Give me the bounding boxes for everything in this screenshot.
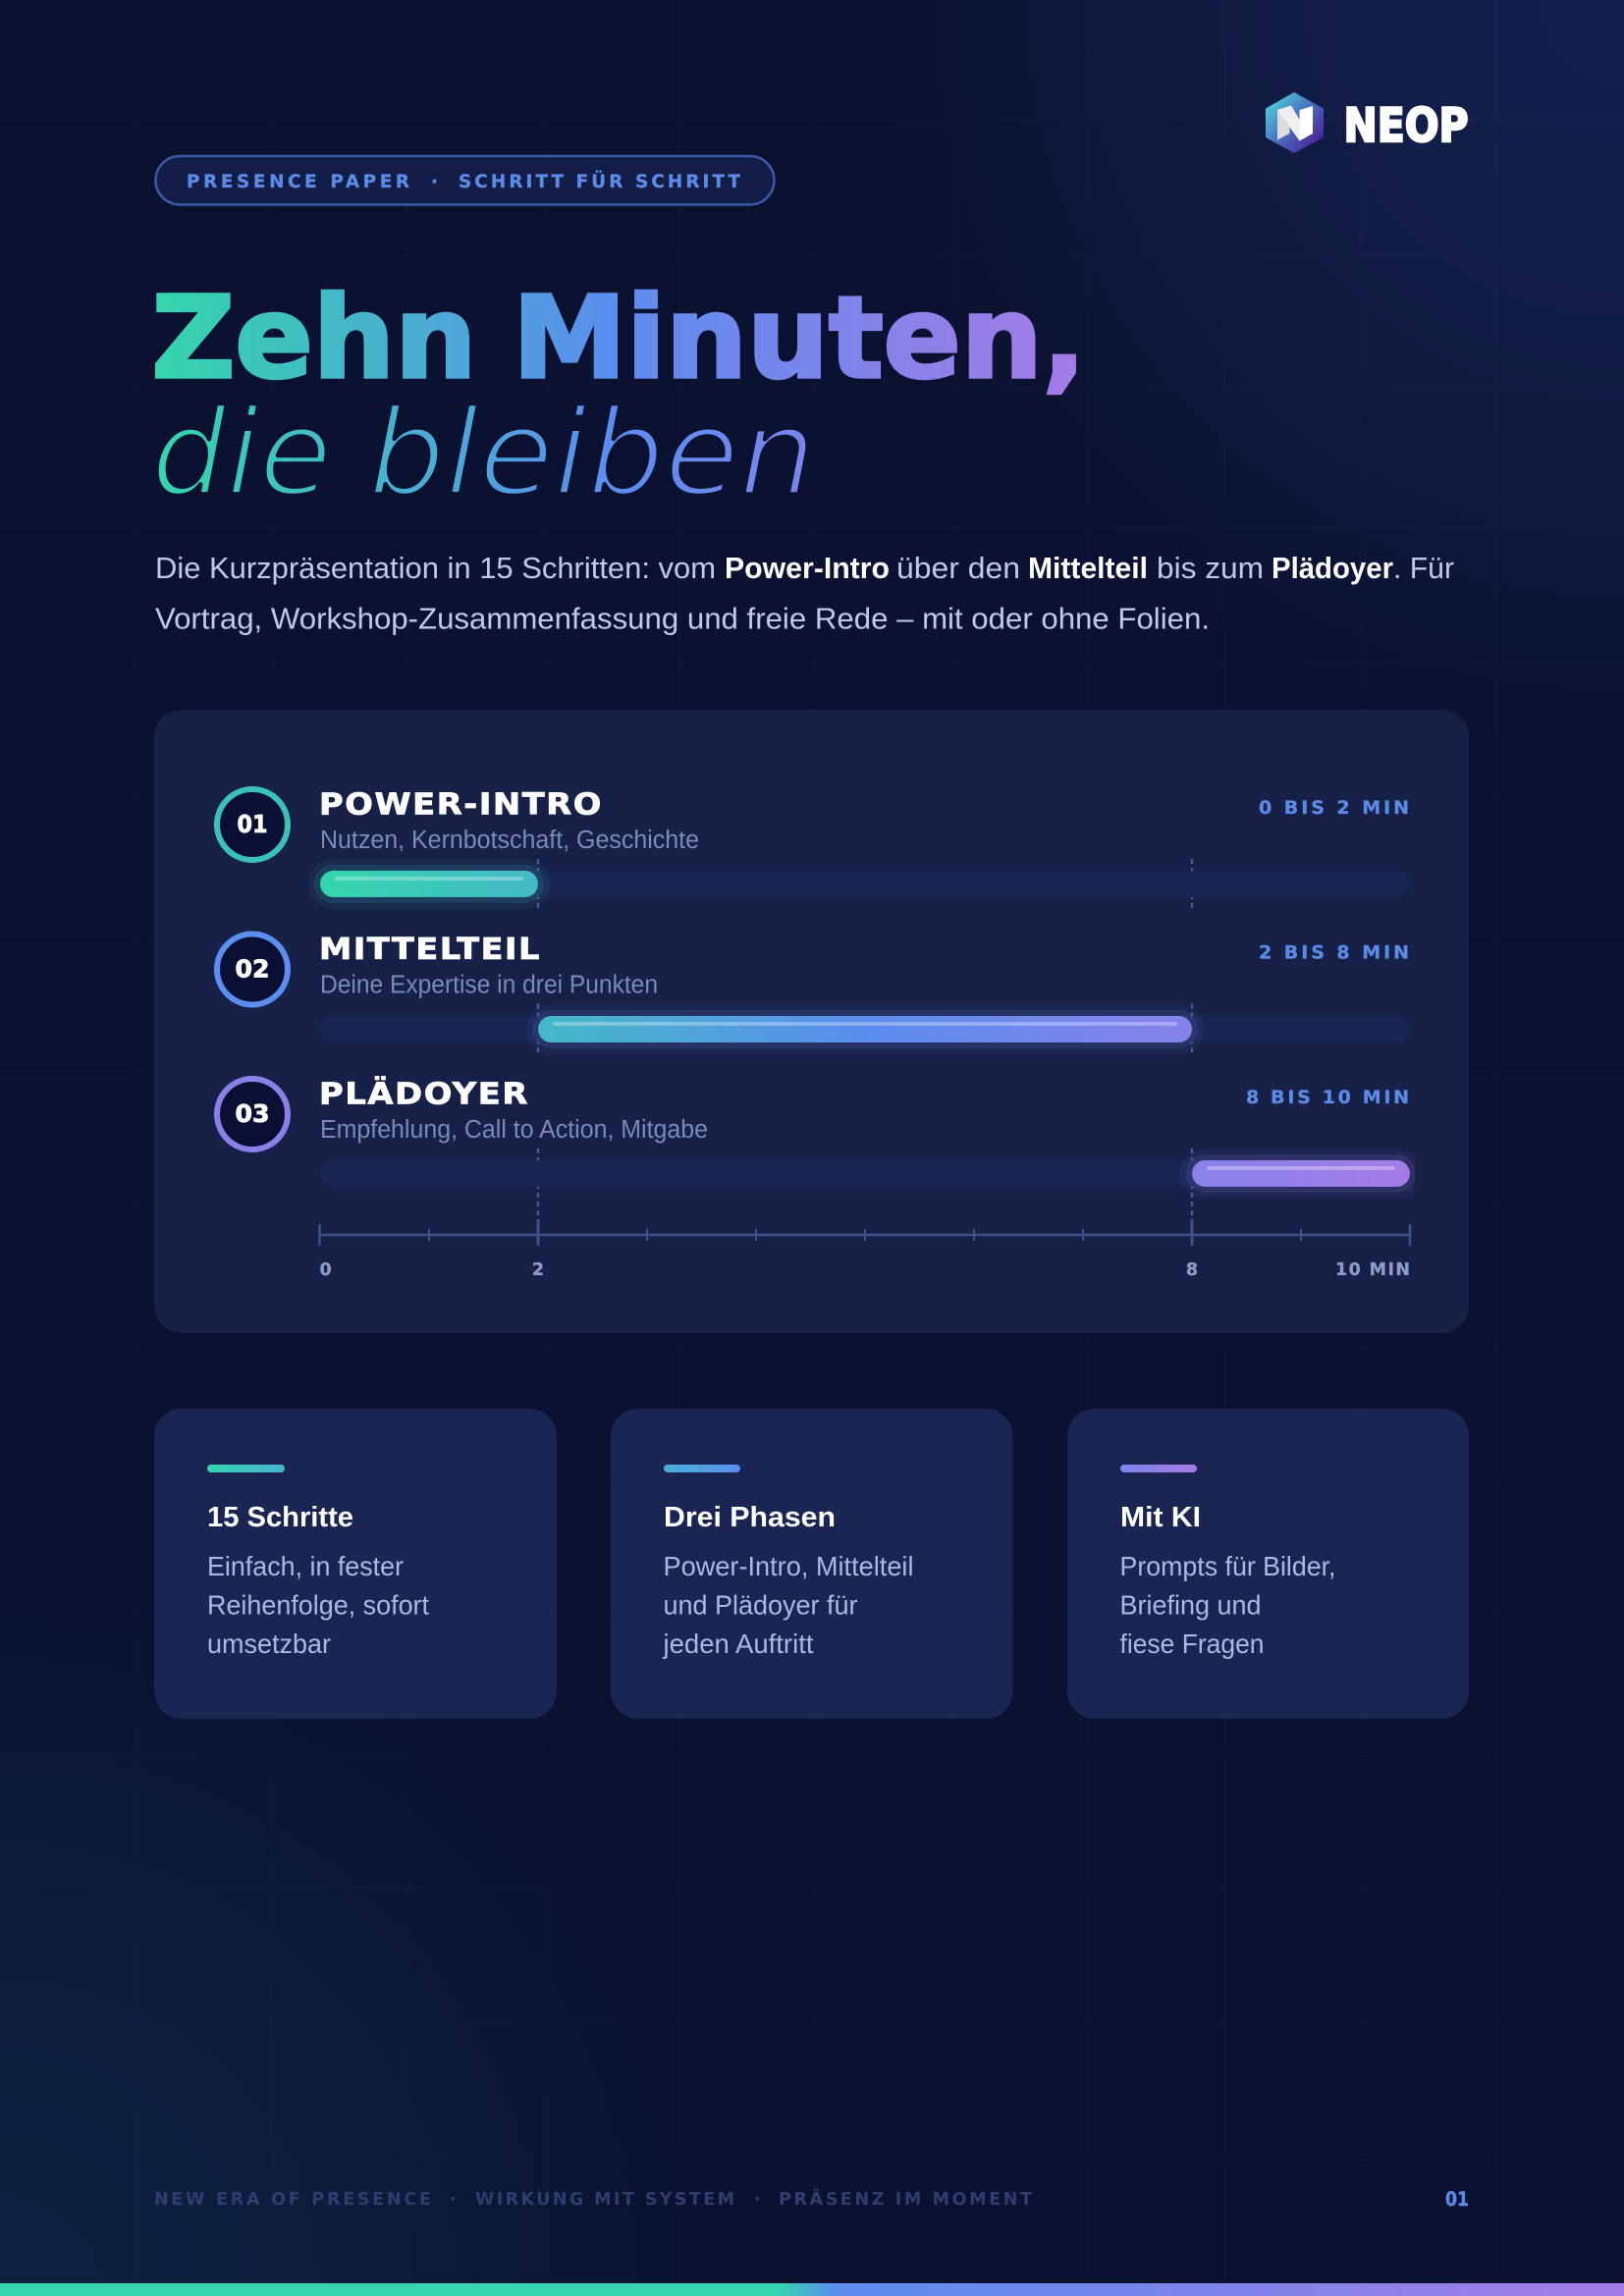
time axis: 0 (320, 1260, 332, 1280)
footer tagline: PRÄSENZ IM MOMENT (779, 2188, 1032, 2210)
page number: 01 (1445, 2188, 1469, 2211)
card: Mit KI: Mit KI (1120, 1502, 1201, 1533)
time axis: 10 MIN (1335, 1260, 1410, 1280)
panel: timeline (154, 710, 1469, 1333)
step number 03: 03 (236, 1099, 269, 1128)
card: Drei Phasen: und Plädoyer für (664, 1590, 858, 1620)
intro paragraph: . Für (1393, 552, 1454, 585)
footer tagline: NEW ERA OF PRESENCE (154, 2190, 431, 2210)
title line 1: Minuten, (513, 273, 1086, 404)
footer tagline (154, 2188, 1032, 2210)
row: Mittelteil (217, 933, 1410, 1054)
title line 2: die (151, 385, 332, 522)
title (151, 273, 1086, 522)
card: 15 Schritte: Einfach, in fester (207, 1551, 404, 1581)
guide lines: minute 2 and 8 (538, 859, 1192, 1220)
time axis: 2 (532, 1260, 544, 1280)
title line 1: Zehn (151, 273, 477, 404)
intro paragraph: Mittelteil (1028, 552, 1148, 585)
title line 2 (151, 385, 816, 522)
bottom gradient bar (0, 2283, 1624, 2296)
row: Power-Intro (217, 787, 1410, 909)
row: Plädoyer (217, 1076, 1422, 1199)
heading: POWER-INTRO (319, 787, 603, 823)
progress bar (308, 859, 1410, 909)
footer tagline: · (754, 2190, 761, 2210)
card: Drei Phasen: Drei Phasen (664, 1502, 836, 1533)
badge: presence paper pill (155, 156, 774, 204)
progress bar (320, 1148, 1422, 1199)
step number 01 (217, 789, 288, 860)
step number 03 (217, 1079, 288, 1149)
card: 15 Schritte: Reihenfolge, sofort (207, 1590, 429, 1620)
title line 1 (151, 273, 1086, 404)
heading: MITTELTEIL (319, 933, 541, 967)
step number 02 (217, 934, 288, 1005)
time label: 0 BIS 2 MIN (1259, 797, 1409, 819)
description: Nutzen, Kernbotschaft, Geschichte (320, 827, 699, 854)
time axis (320, 1220, 1410, 1280)
description: Empfehlung, Call to Action, Mitgabe (320, 1116, 708, 1144)
time axis: 8 (1186, 1260, 1198, 1280)
title line 2: bleiben (368, 385, 816, 522)
card: Mit KI: fiese Fragen (1119, 1629, 1265, 1659)
card: 15 Schritte: 15 Schritte (207, 1502, 353, 1533)
intro paragraph: Vortrag, Workshop-Zusammenfassung und freie Rede – mit oder ohne Folien. (155, 603, 1210, 636)
badge: presence paper pill: · (431, 172, 438, 192)
progress bar (320, 1004, 1410, 1054)
footer tagline: · (450, 2190, 457, 2210)
card: 15 Schritte (154, 1409, 557, 1719)
card: Mit KI: Prompts für Bilder, (1119, 1551, 1335, 1581)
footer (154, 2188, 1469, 2211)
card: Drei Phasen: Power-Intro, Mittelteil (664, 1551, 913, 1581)
intro paragraph: Power-Intro (725, 552, 890, 585)
heading: PLÄDOYER (319, 1076, 529, 1111)
time label: 2 BIS 8 MIN (1259, 942, 1409, 964)
logo wordmark: NEOP (1343, 99, 1469, 153)
card: Drei Phasen: jeden Auftritt (662, 1629, 814, 1659)
badge: presence paper pill: SCHRITT FÜR SCHRITT (459, 171, 741, 192)
intro paragraph: bis zum (1157, 552, 1264, 585)
step number 01: 01 (238, 810, 267, 838)
time label: 8 BIS 10 MIN (1246, 1087, 1409, 1108)
badge: presence paper pill: PRESENCE PAPER (187, 172, 409, 192)
icon: hexagon with N (1266, 92, 1324, 153)
intro paragraph: Die Kurzpräsentation in 15 Schritten: vom (155, 552, 716, 585)
card: Mit KI: Briefing und (1119, 1590, 1261, 1620)
card: Drei Phasen (611, 1409, 1013, 1719)
intro paragraph: Plädoyer (1272, 552, 1393, 585)
logo: NEOP (1266, 92, 1469, 153)
card: Mit KI (1067, 1409, 1469, 1719)
intro paragraph: über den (896, 552, 1020, 585)
step number 02: 02 (236, 954, 269, 984)
footer tagline: WIRKUNG MIT SYSTEM (475, 2190, 734, 2210)
description: Deine Expertise in drei Punkten (320, 972, 658, 999)
intro paragraph (155, 552, 1454, 636)
card: 15 Schritte: umsetzbar (207, 1629, 331, 1659)
